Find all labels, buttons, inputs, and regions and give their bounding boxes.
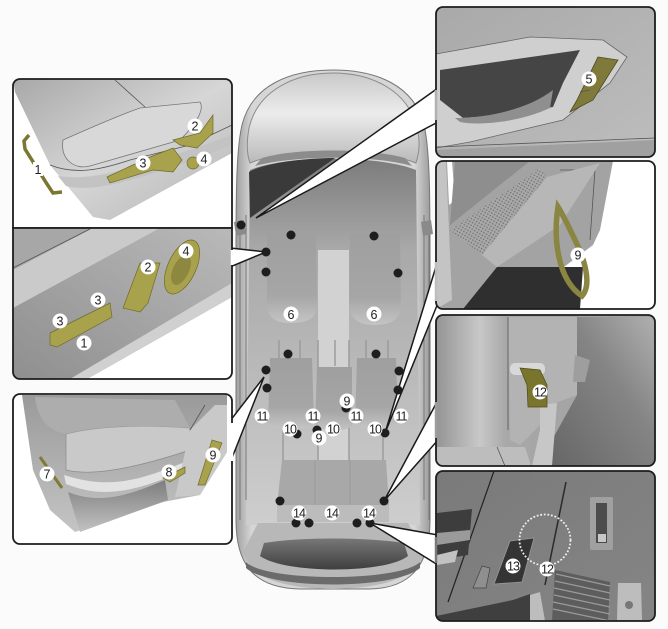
knob 4 — [187, 157, 199, 169]
lever 2 — [173, 115, 213, 148]
panel: cargo side panel: 12 — [541, 562, 554, 576]
rear trunk recess — [260, 538, 408, 570]
callout wedge: third row lever — [384, 400, 438, 501]
lever 8 — [163, 467, 185, 482]
second row centre seat — [315, 367, 352, 430]
panel: seat control detail: 4 — [183, 244, 190, 258]
callout wedge: second row seat — [230, 377, 264, 463]
number labels on vehicle: 14 — [363, 506, 376, 520]
number labels on vehicle: 6 — [371, 308, 378, 322]
perforated trim — [450, 168, 547, 255]
panel: front seat side view: 2 — [192, 120, 199, 134]
callout wedge: front seat — [230, 248, 266, 267]
lever 7 — [40, 457, 62, 488]
number labels on vehicle: 10 — [284, 422, 297, 436]
front left seat — [267, 233, 317, 323]
loop strap 9 — [556, 207, 587, 296]
panel: seat folding lever — [436, 315, 655, 466]
number labels on vehicle: 11 — [351, 410, 363, 424]
dotted highlight circle — [520, 514, 570, 566]
control handle 3 and 1 — [50, 303, 112, 347]
panel: strap on seat trim: 9 — [575, 248, 582, 262]
panel: front seat side view: 1 — [35, 163, 42, 177]
cabin floor — [246, 159, 420, 525]
number labels on vehicle: 10 — [327, 422, 340, 436]
number labels on vehicle: 11 — [308, 410, 320, 424]
panel: second row seat side view: 8 — [166, 466, 173, 480]
panel: door handle switch — [436, 7, 655, 157]
window frame — [590, 497, 613, 550]
panel: front seat side view: 4 — [201, 152, 208, 166]
panel: seat control detail: 2 — [145, 260, 152, 274]
callout wedge: cargo release — [370, 523, 438, 565]
number labels on vehicle: 11 — [257, 410, 269, 424]
number labels on vehicle: 9 — [344, 394, 351, 408]
panel: seat control detail: 3 — [57, 314, 64, 328]
callout wedge: second row strap — [385, 260, 438, 433]
number labels on vehicle: 10 — [369, 422, 382, 436]
windshield — [247, 73, 419, 163]
callout wedge: door switch — [256, 88, 438, 218]
centre floor — [318, 250, 349, 460]
lever 3 — [107, 148, 182, 183]
second row right seat — [355, 358, 398, 428]
front right seat — [349, 234, 401, 325]
small switch — [473, 566, 490, 588]
third row bench — [277, 460, 389, 522]
anchor dots — [236, 220, 404, 528]
control handle 2 — [123, 263, 160, 312]
panel: cargo side panel — [436, 471, 655, 621]
number labels on vehicle: 14 — [326, 506, 339, 520]
panel: second row seat side view: 7 — [44, 468, 51, 482]
loop handle 1 — [24, 135, 62, 193]
dashboard dark area — [249, 158, 335, 218]
panel: seat control detail — [13, 228, 232, 379]
panel: cargo side panel: 13 — [507, 560, 520, 574]
panel: seat folding lever: 12 — [534, 386, 547, 400]
window switches — [570, 57, 618, 112]
number labels on vehicle: 9 — [316, 432, 323, 446]
number labels on vehicle: 11 — [396, 410, 408, 424]
strap 9 — [198, 440, 222, 485]
control knob 4 — [164, 240, 200, 294]
panel: second row seat side view: 9 — [210, 448, 217, 462]
number labels on vehicle: 14 — [293, 506, 306, 520]
vent grille — [552, 570, 610, 621]
release panel 13 — [494, 538, 534, 584]
rear cargo floor — [243, 523, 424, 589]
number labels on vehicle — [254, 306, 408, 520]
second row left seat — [268, 358, 314, 428]
wedge openings — [232, 90, 436, 563]
panel: front seat side view — [13, 79, 232, 228]
panel: second row seat side view — [13, 394, 232, 544]
panel: strap on seat trim — [436, 161, 655, 309]
number labels on vehicle: 6 — [288, 308, 295, 322]
lever 12 — [520, 368, 547, 407]
panel: seat control detail: 1 — [81, 336, 88, 350]
panel: door handle switch: 5 — [586, 72, 593, 86]
vehicle top view — [234, 70, 433, 589]
slot — [510, 363, 545, 375]
panel: seat control detail: 3 — [95, 294, 102, 308]
panel: front seat side view: 3 — [140, 156, 147, 170]
lower button — [617, 583, 642, 620]
left seat-belt buckle cluster — [437, 509, 472, 560]
